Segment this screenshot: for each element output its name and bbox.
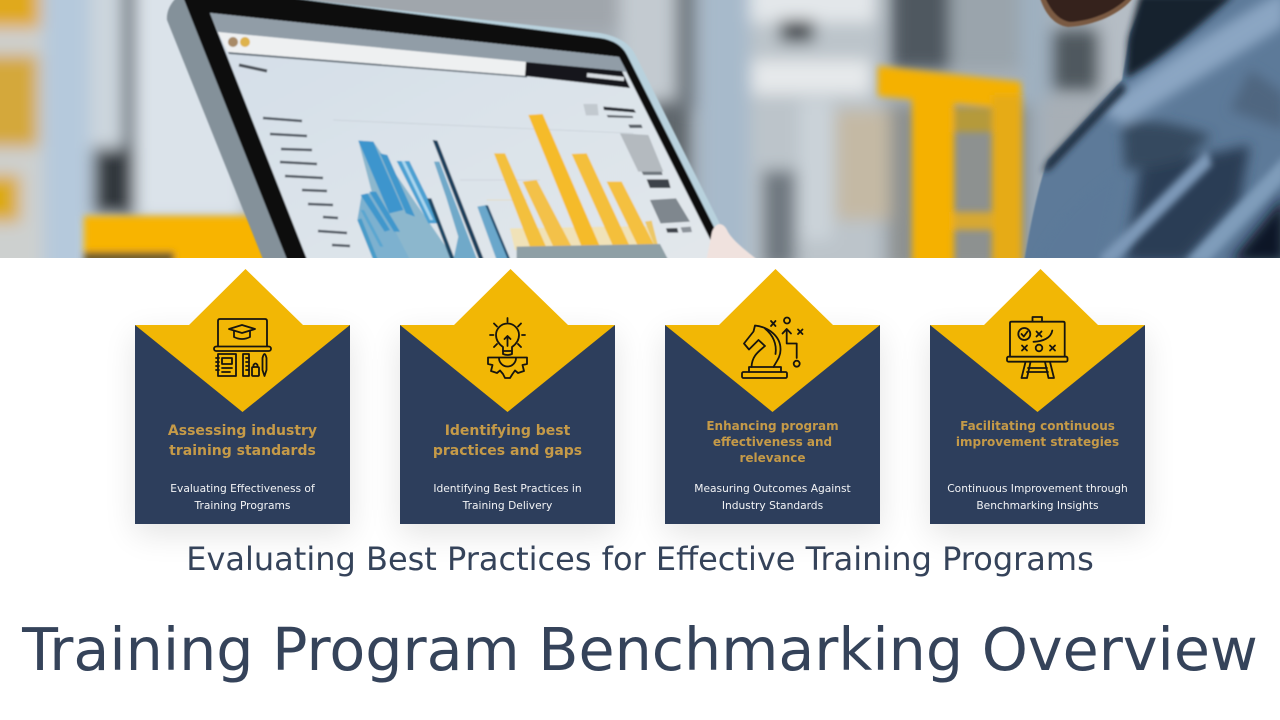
card 4: facilitating continuous improvement strategies bbox=[922, 269, 1152, 542]
card 1 heading: training standards bbox=[169, 442, 316, 458]
card 2 heading: practices and gaps bbox=[433, 442, 582, 458]
card 2 description bbox=[433, 482, 582, 512]
chart bars bbox=[333, 104, 692, 260]
card 2: identifying best practices and gaps bbox=[392, 269, 622, 542]
icon: laptop with graduation cap and stationery bbox=[214, 319, 271, 376]
card 3 yellow diamond and icon bbox=[665, 269, 880, 412]
card 4 heading bbox=[956, 419, 1119, 449]
side panel details bbox=[583, 104, 599, 115]
left background bbox=[0, 0, 50, 280]
card 4 background panel bbox=[930, 325, 1145, 524]
card 2 description: Training Delivery bbox=[463, 499, 552, 512]
jacket and beard bbox=[1024, 0, 1280, 262]
icon: light bulb on gear bbox=[488, 318, 527, 378]
right background bbox=[620, 0, 675, 280]
card 4 heading: Facilitating continuous bbox=[960, 419, 1115, 433]
card 4 heading: improvement strategies bbox=[956, 435, 1119, 449]
card 3 description bbox=[694, 482, 851, 512]
card 2 background panel bbox=[400, 325, 615, 524]
card 2 heading: Identifying best bbox=[445, 422, 570, 438]
card 1 description: Training Programs bbox=[195, 499, 290, 512]
tablet bbox=[167, 0, 760, 262]
card 3 heading: effectiveness and bbox=[713, 435, 832, 449]
icon: chess knight with strategy marks bbox=[742, 318, 802, 378]
icon: strategy board on easel bbox=[1007, 317, 1068, 378]
title: Training Program Benchmarking Overview bbox=[22, 616, 1258, 684]
yellow frame right bbox=[954, 108, 992, 132]
card 2 heading bbox=[433, 422, 582, 458]
card 3 heading: relevance bbox=[739, 451, 806, 465]
hand holding tablet bbox=[706, 224, 760, 262]
card 1 heading: Assessing industry bbox=[168, 422, 317, 438]
card 1: assessing industry training standards bbox=[128, 269, 358, 542]
card 1 description bbox=[170, 482, 315, 512]
yellow bar bottom left bbox=[84, 216, 284, 266]
card 3: enhancing program effectiveness and relevance bbox=[658, 269, 888, 542]
card 3 description: Industry Standards bbox=[722, 499, 823, 512]
card 1 yellow diamond and icon bbox=[135, 269, 350, 412]
card 3 heading bbox=[706, 419, 839, 465]
card 2 description: Identifying Best Practices in bbox=[433, 482, 582, 495]
top behind tablet bbox=[280, 0, 630, 30]
card 4 description: Continuous Improvement through bbox=[947, 482, 1128, 495]
subtitle: Evaluating Best Practices for Effective Training Programs bbox=[186, 540, 1094, 578]
card 3 description: Measuring Outcomes Against bbox=[694, 482, 851, 495]
card 1 background panel bbox=[135, 325, 350, 524]
card 4 description: Benchmarking Insights bbox=[976, 499, 1099, 512]
card 1 description: Evaluating Effectiveness of bbox=[170, 482, 315, 495]
card 4 description bbox=[947, 482, 1128, 512]
card 3 heading: Enhancing program bbox=[706, 419, 839, 433]
hero photo: tablet showing charts bbox=[0, 0, 1280, 258]
card 4 yellow diamond and icon bbox=[930, 269, 1145, 412]
card 1 heading bbox=[168, 422, 317, 458]
card 3 background panel bbox=[665, 325, 880, 524]
card 2 yellow diamond and icon bbox=[400, 269, 615, 412]
